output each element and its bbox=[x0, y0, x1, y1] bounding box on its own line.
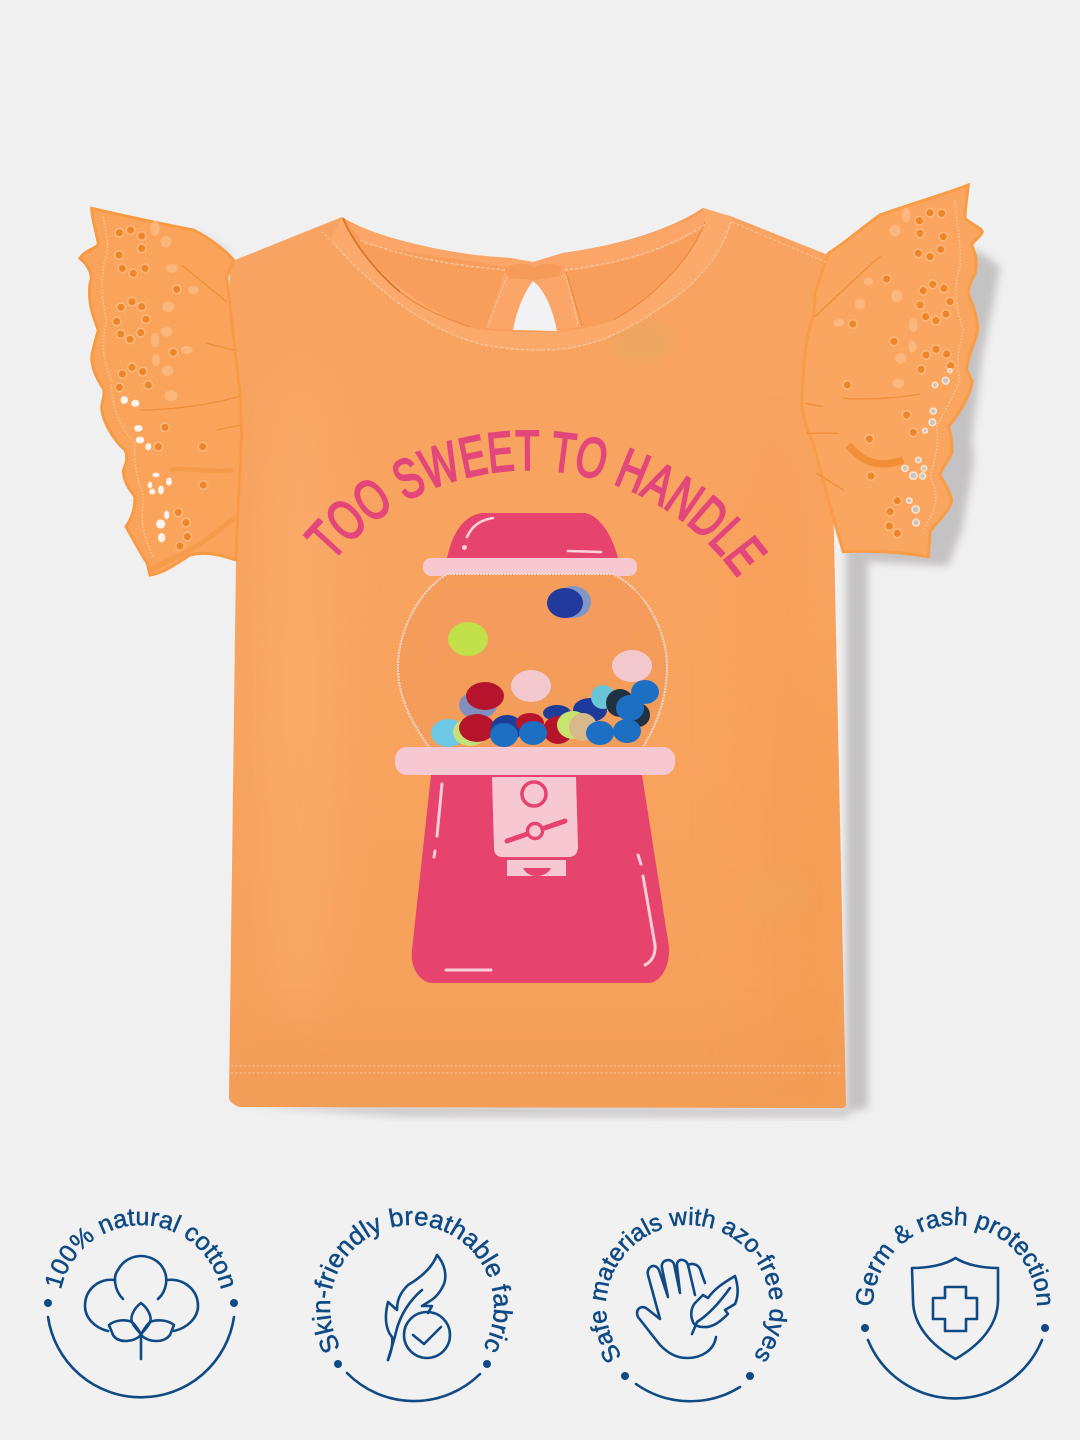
icon: shield with cross bbox=[912, 1258, 998, 1359]
gumball machine print bbox=[395, 513, 675, 983]
badge: skin-friendly breathable fabric bbox=[312, 1208, 513, 1402]
keyhole placket bbox=[486, 253, 582, 331]
badge caption: Skin-friendly breathable fabric bbox=[312, 1208, 513, 1352]
badge dots and arc bbox=[334, 1360, 491, 1401]
gumball machine cap bbox=[447, 513, 618, 558]
neckline seam bbox=[343, 218, 705, 327]
left sleeve lace border bbox=[102, 217, 153, 557]
front collar band bbox=[330, 208, 733, 351]
hem stitching bbox=[231, 1066, 842, 1073]
left eyelet sleeve bbox=[80, 208, 242, 575]
t-shirt product photo bbox=[78, 182, 1002, 1120]
collar stitches bbox=[332, 222, 731, 350]
back collar band bbox=[347, 212, 707, 272]
right sleeve folds bbox=[805, 256, 920, 490]
clear sequin globe bbox=[398, 574, 667, 757]
product infographic canvas bbox=[44, 182, 1050, 1402]
collar bbox=[330, 208, 733, 351]
keyhole back opening bbox=[513, 281, 557, 331]
inside back of neck bbox=[343, 208, 708, 332]
lower collar band bbox=[395, 747, 675, 775]
chute mouth bbox=[523, 868, 551, 876]
badge: 100% natural cotton bbox=[44, 1209, 238, 1399]
right sleeve pale embroidery bbox=[833, 208, 918, 388]
badge caption: Safe materials with azo-free dyes bbox=[590, 1206, 788, 1362]
right sleeve eyelets bbox=[843, 208, 955, 538]
coin slot ring bbox=[522, 782, 546, 806]
badge caption: Germ & rash protection bbox=[856, 1206, 1050, 1306]
left sleeve eyelets bbox=[112, 226, 208, 550]
icon: hand with leaf bbox=[637, 1260, 738, 1358]
gumball machine base bbox=[412, 775, 669, 983]
coin panel bbox=[492, 777, 578, 857]
badge dots and arc bbox=[621, 1372, 754, 1401]
globe window tint bbox=[420, 590, 650, 680]
left sleeve folds bbox=[140, 265, 241, 570]
icon: feather with check bbox=[386, 1255, 450, 1360]
badge caption: 100% natural cotton bbox=[46, 1209, 234, 1289]
badge: safe materials with azo-free dyes bbox=[590, 1206, 788, 1402]
left sleeve pale embroidery bbox=[150, 221, 198, 401]
icon: cotton boll bbox=[85, 1256, 198, 1359]
badge dots and arc bbox=[44, 1299, 238, 1397]
upper collar band bbox=[423, 558, 637, 576]
drop shadow behind shirt bbox=[192, 228, 1000, 1117]
right eyelet sleeve bbox=[802, 185, 982, 557]
gumball chute bbox=[507, 860, 566, 876]
badge: germ and rash protection bbox=[856, 1206, 1050, 1400]
badge dots and arc bbox=[861, 1324, 1049, 1398]
slogan text: too sweet to handle: TOO SWEET TO HANDLE bbox=[302, 430, 768, 578]
button loop bbox=[505, 264, 562, 280]
base highlights bbox=[434, 784, 655, 970]
right sleeve open holes bbox=[902, 369, 952, 526]
crank handle bbox=[507, 821, 565, 841]
fabric shading folds bbox=[229, 322, 849, 1130]
cap highlights bbox=[463, 518, 601, 552]
shoulder seam stitches bbox=[322, 222, 826, 262]
t-shirt body bbox=[225, 208, 846, 1108]
right sleeve lace border bbox=[923, 200, 963, 530]
sequins bbox=[431, 586, 659, 747]
left sleeve open holes bbox=[121, 396, 172, 542]
